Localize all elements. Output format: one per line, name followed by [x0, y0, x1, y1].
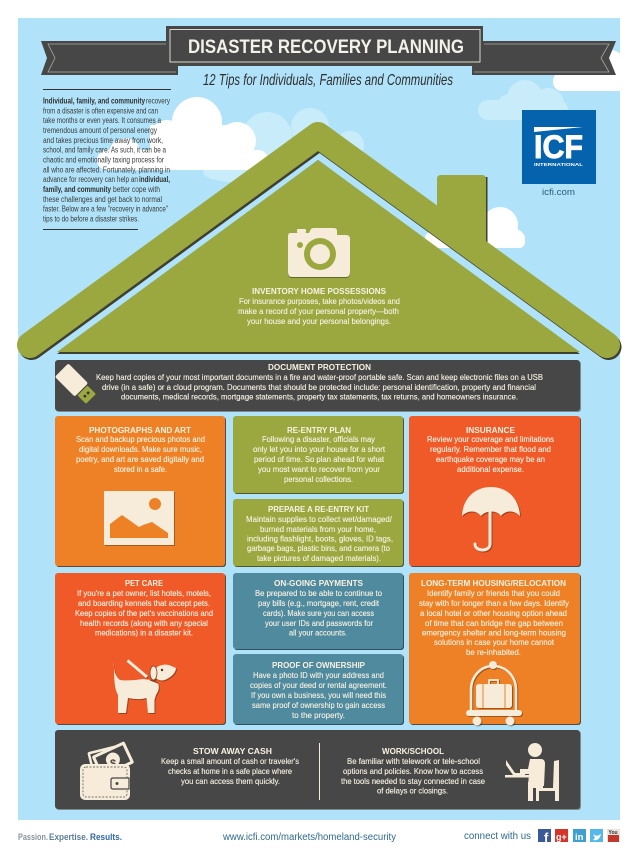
intro text block: better cope with — [113, 185, 160, 194]
title: DISASTER RECOVERY PLANNING — [188, 37, 464, 58]
icon: luggage cart — [466, 661, 522, 726]
body text — [75, 589, 213, 638]
body text: stow away cash: you can access them quickly. — [181, 777, 280, 786]
icon: camera — [288, 228, 350, 278]
footer tagline: Expertise. — [49, 832, 88, 843]
intro text block: Individual, family, and community — [43, 96, 145, 106]
ribbon tail right — [472, 41, 616, 75]
intro text block: school, and family care. As such, it can be a — [43, 146, 166, 155]
body text: including flashlight, boots, gloves, ID tags, — [247, 534, 393, 544]
title ribbon — [41, 26, 616, 75]
panel: re-entry plan — [233, 416, 404, 494]
body text: documents, medical records, mortgage statements, property tax statements, tax returns, and homeowners insurance. — [121, 392, 518, 402]
body text — [255, 589, 382, 638]
heading: LONG-TERM HOUSING/RELOCATION — [421, 578, 566, 588]
panel: pet care — [55, 573, 226, 725]
body text: For insurance purposes, take photos/videos and — [239, 297, 400, 306]
house — [30, 135, 608, 354]
body text: make a record of your personal property—both — [238, 307, 399, 316]
body text: stow away cash — [161, 757, 299, 786]
panel: document protection — [55, 360, 581, 412]
ICF logo: ICF — [534, 129, 583, 165]
subtitle: 12 Tips for Individuals, Families and Communities — [203, 72, 453, 89]
icon: youtube: You — [608, 830, 618, 836]
body text: medications) in a disaster kit. — [95, 628, 193, 638]
icon: wallet: $ — [110, 758, 116, 770]
body text: Keep hard copies of your most important documents in a fire and water-proof portable safe. Scan and keep electronic files on a USB — [96, 373, 543, 382]
body text: your house and your personal belongings. — [247, 317, 391, 326]
body text: take pictures of damaged materials). — [257, 554, 381, 563]
icon: twitter — [590, 829, 603, 842]
body text — [76, 435, 205, 474]
heading: ON-GOING PAYMENTS — [274, 578, 363, 588]
body text: a local hotel or other housing option ahead — [420, 609, 567, 618]
panel: on-going payments — [233, 573, 404, 650]
heading: work/school: WORK/SCHOOL — [382, 746, 444, 756]
intro text block: tremendous amount of personal energy — [43, 126, 157, 135]
body text: drive (in a safe) or a cloud program. Documents that should be protected include: personal identification, property and financial — [102, 383, 536, 392]
body text — [246, 515, 393, 563]
body text: work/school: the tools needed to stay connected in case — [341, 777, 485, 786]
panel: photographs and art — [55, 416, 226, 567]
body text: Have a photo ID with your address and — [253, 671, 384, 680]
body text: If you're a pet owner, list hotels, motels, — [77, 589, 211, 598]
intro text block: faster. Below are a few "recovery in advance" — [43, 205, 168, 214]
icon: usb drive — [55, 363, 96, 404]
footer tagline: Passion. — [18, 832, 48, 843]
body text: regularly. Remember that flood and — [430, 445, 551, 454]
body text: health records (along with any special — [80, 619, 208, 628]
icon: facebook: f — [544, 830, 549, 845]
body text: work/school: of delays or closings. — [377, 786, 448, 796]
panel: inventory home possessions — [238, 228, 400, 326]
body text: Scan and backup precious photos and — [76, 435, 205, 444]
body text: work/school: options and policies. Know how to access — [343, 767, 483, 776]
chimney — [437, 175, 488, 262]
intro text block: family, and community — [43, 185, 111, 194]
clouds — [97, 50, 633, 248]
intro text block: all who are affected. Fortunately, planning in — [43, 165, 170, 174]
heading: PHOTOGRAPHS AND ART — [89, 425, 192, 435]
ribbon tail left — [41, 41, 178, 75]
body text: your user IDs and passwords for — [265, 619, 373, 628]
footer url: www.icfi.com/markets/homeland-security — [222, 832, 396, 843]
body text: work/school — [341, 757, 485, 796]
intro text block: recovery — [146, 96, 170, 106]
heading: stow away cash: STOW AWAY CASH — [193, 746, 272, 756]
roof — [30, 135, 608, 347]
body text: digital downloads. Make sure music, — [79, 445, 202, 454]
body text: work/school: Be familiar with telework or tele-school — [347, 757, 480, 766]
body text: to the property. — [292, 711, 345, 720]
panel: insurance — [409, 416, 581, 567]
body text: additional expense. — [457, 465, 524, 474]
body text: stow away cash: Keep a small amount of cash or traveler's — [161, 757, 299, 766]
body text: Review your coverage and limitations — [427, 435, 554, 444]
body text: personal collections. — [284, 475, 353, 484]
intro text block: take months or even years. It consumes a — [43, 116, 161, 125]
panel: prepare a re-entry kit — [233, 499, 404, 567]
icon: google plus: g+ — [556, 832, 567, 842]
body text: solutions in case your home cannot — [434, 638, 555, 647]
connect with us: connect with us — [464, 830, 531, 842]
body text: Identify family or friends that you could — [427, 589, 560, 598]
intro text block: from a disaster is often expensive and can — [43, 106, 158, 115]
intro text block: individual, — [139, 175, 170, 184]
body text: same proof of ownership to gain access — [252, 701, 385, 710]
icon: linkedin: in — [575, 832, 584, 843]
body text: copies of your deed or rental agreement. — [250, 681, 387, 690]
heading: DOCUMENT PROTECTION — [268, 362, 371, 372]
house body — [57, 160, 580, 354]
panel: stow away cash and work/school — [55, 730, 581, 810]
icon: dog with leash — [114, 660, 176, 713]
body text: Be prepared to be able to continue to — [255, 589, 382, 598]
body text: Following a disaster, officials may — [262, 435, 376, 444]
body text: period of time. So plan ahead for what — [254, 455, 385, 464]
body text — [238, 297, 400, 326]
heading: INSURANCE — [466, 425, 515, 435]
icon: umbrella — [462, 487, 520, 550]
body text: stay with for longer than a few days. Identify — [419, 599, 570, 608]
body text: pay bills (e.g., mortgage, rent, credit — [258, 599, 380, 608]
body text: be re-inhabited. — [466, 648, 521, 657]
heading: INVENTORY HOME POSSESSIONS — [252, 286, 386, 296]
intro text block: advance for recovery can help an — [43, 175, 138, 184]
intro text block: chaotic and emotionally taxing process for — [43, 156, 164, 164]
body text: and boarding kennels that accept pets. — [78, 599, 210, 608]
body text: emergency shelter and long-term housing — [422, 628, 566, 638]
body text: only let you into your house for a short — [253, 445, 386, 454]
body text — [96, 373, 543, 402]
body text: garbage bags, plastic bins, and camera (to — [247, 544, 390, 553]
body text — [419, 589, 570, 657]
body text: stow away cash: checks at home in a safe place where — [168, 767, 292, 776]
panel: proof of ownership — [233, 654, 404, 725]
body text: you most want to recover from your — [258, 465, 380, 474]
icon: wallet — [80, 741, 134, 800]
ribbon main — [166, 26, 483, 66]
footer tagline — [18, 832, 122, 843]
body text: Maintain supplies to collect wet/damaged/ — [246, 515, 393, 524]
body text: If you own a business, you will need this — [251, 691, 386, 700]
body text: Keep copies of the pet's vaccinations and — [75, 609, 213, 618]
body text: earthquake coverage may be an — [436, 455, 545, 464]
ICF logo — [522, 110, 596, 184]
body text — [250, 671, 387, 720]
body text — [427, 435, 554, 474]
social icons — [538, 829, 620, 845]
body text: burned materials from your home, — [260, 525, 376, 534]
panel: long-term housing/relocation — [409, 573, 581, 726]
intro text block: and takes precious time away from work, — [43, 136, 163, 145]
icon: person at laptop — [505, 743, 559, 801]
body text: poetry, and art are saved digitally and — [76, 455, 204, 464]
heading: RE-ENTRY PLAN — [287, 425, 351, 435]
intro text block — [43, 89, 171, 230]
heading: PROOF OF OWNERSHIP — [272, 660, 365, 670]
icon: picture — [104, 491, 175, 546]
body text: of time that can bridge the gap between — [425, 619, 563, 628]
logo caption: icfi.com — [542, 187, 575, 197]
body text: stored in a safe. — [114, 465, 167, 474]
heading: PREPARE A RE-ENTRY KIT — [268, 504, 370, 514]
ICF logo: INTERNATIONAL — [534, 162, 583, 167]
intro text block: these challenges and get back to normal — [43, 195, 162, 204]
heading: PET CARE — [125, 578, 163, 588]
body text — [253, 435, 386, 484]
body text: all your accounts. — [289, 628, 347, 638]
body text: cards). Make sure you can access — [263, 609, 374, 618]
footer tagline: Results. — [90, 832, 122, 843]
intro text block: tips to do before a disaster strikes. — [43, 214, 139, 223]
